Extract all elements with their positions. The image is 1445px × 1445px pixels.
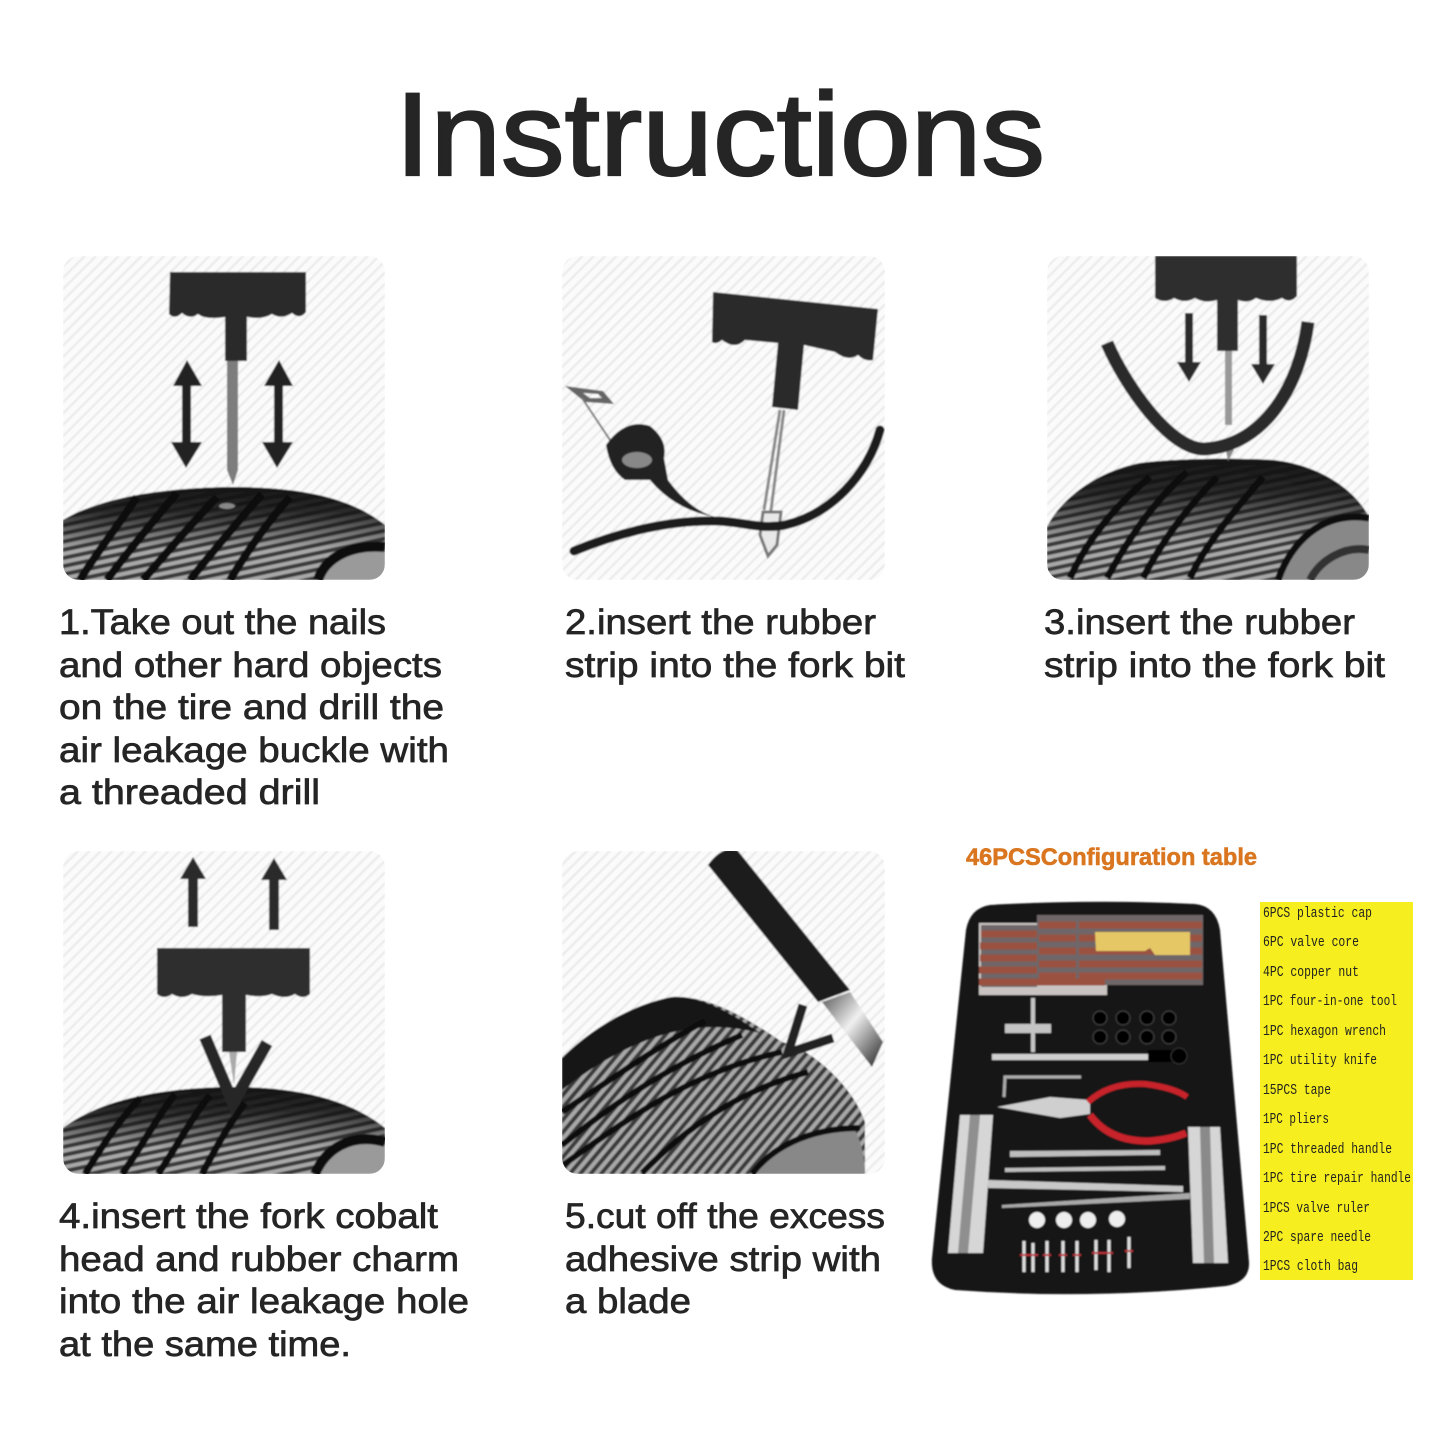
plastic caps bbox=[1093, 1011, 1176, 1044]
icon: rubber strip V bbox=[205, 1037, 267, 1103]
parts list text: 1PCS valve ruler bbox=[1263, 1201, 1370, 1217]
parts list text: 6PC valve core bbox=[1263, 935, 1359, 951]
copper nuts bbox=[1029, 1211, 1125, 1228]
step 4 text: into the air leakage hole bbox=[59, 1282, 469, 1321]
icon: valve and flag bbox=[565, 386, 715, 517]
parts list text: 1PC threaded handle bbox=[1263, 1142, 1392, 1158]
parts list text: 1PC utility knife bbox=[1263, 1053, 1377, 1069]
valve ruler bbox=[992, 1048, 1187, 1064]
panel: step 1 illustration bbox=[63, 256, 385, 580]
step 1 text: a threaded drill bbox=[59, 773, 320, 812]
icon: rubber strip bbox=[1107, 322, 1308, 449]
step 2 text: 2.insert the rubber bbox=[565, 603, 876, 642]
step 4 text: 4.insert the fork cobalt bbox=[59, 1197, 438, 1236]
parts list text: 2PC spare needle bbox=[1263, 1230, 1371, 1246]
arrow: left double bbox=[171, 360, 202, 468]
arrow: right double bbox=[262, 360, 293, 468]
yellow background bbox=[1260, 902, 1413, 1280]
panel: step 5 illustration bbox=[562, 850, 885, 1174]
step 4 text: head and rubber charm bbox=[59, 1240, 459, 1279]
step 5 text: a blade bbox=[565, 1282, 691, 1321]
step 1 text: 1.Take out the nails bbox=[59, 603, 386, 642]
T-handle tubes bbox=[948, 1115, 1228, 1263]
arrow: down left bbox=[1177, 313, 1201, 382]
tire strip packs bbox=[979, 915, 1203, 995]
parts list bbox=[1260, 902, 1413, 1280]
icon: T-handle bbox=[1155, 256, 1297, 461]
icon: T-handle tilted bbox=[712, 292, 878, 410]
icon: tire bbox=[63, 487, 385, 580]
pliers bbox=[997, 1084, 1187, 1141]
panel: step 2 illustration bbox=[562, 256, 885, 580]
panel: step 3 illustration bbox=[1047, 256, 1369, 580]
parts list text: 15PCS tape bbox=[1263, 1083, 1331, 1099]
bag bbox=[932, 902, 1249, 1294]
step 4 text bbox=[59, 1197, 469, 1364]
parts list text: 6PCS plastic cap bbox=[1263, 906, 1372, 922]
step 3 text bbox=[1044, 603, 1385, 685]
arrow: down right bbox=[1251, 315, 1275, 384]
step 4 text: at the same time. bbox=[59, 1325, 351, 1364]
icon: tire bbox=[63, 1087, 385, 1174]
icon: tire bbox=[562, 997, 865, 1174]
arrow: up left bbox=[180, 857, 206, 927]
parts list text: 1PC pliers bbox=[1263, 1112, 1329, 1128]
arrow: up right bbox=[261, 858, 287, 930]
icon: rubber strip bbox=[574, 430, 880, 551]
icon: rubber strip ends bbox=[788, 1005, 833, 1053]
step 5 text: adhesive strip with bbox=[565, 1240, 881, 1279]
parts list text bbox=[1263, 906, 1411, 1275]
icon: tire bbox=[1047, 459, 1369, 580]
icon: knife bbox=[708, 850, 883, 1067]
parts list text: 1PC hexagon wrench bbox=[1263, 1024, 1386, 1040]
configuration table heading: 46PCSConfiguration table bbox=[966, 844, 1257, 871]
valve cores bbox=[1020, 1237, 1133, 1272]
title: Instructions bbox=[395, 69, 1045, 201]
rods and needles bbox=[988, 1150, 1190, 1208]
step 2 text: strip into the fork bit bbox=[565, 646, 905, 685]
photo: tool kit in bag bbox=[932, 902, 1249, 1294]
step 1 text: air leakage buckle with bbox=[59, 731, 449, 770]
step 1 text: on the tire and drill the bbox=[59, 688, 444, 727]
step 3 text: strip into the fork bit bbox=[1044, 646, 1385, 685]
hexagon wrench bbox=[1004, 1077, 1081, 1097]
parts list text: 4PC copper nut bbox=[1263, 965, 1359, 981]
step 1 text: and other hard objects bbox=[59, 646, 442, 685]
step 1 text bbox=[59, 603, 449, 812]
step 5 text bbox=[565, 1197, 885, 1321]
parts list text: 1PCS cloth bag bbox=[1263, 1259, 1358, 1275]
parts list text: 1PC four-in-one tool bbox=[1263, 994, 1397, 1010]
step 2 text bbox=[565, 603, 905, 685]
icon: T-handle with threaded drill bbox=[169, 272, 306, 485]
four-in-one tool bbox=[1005, 998, 1051, 1052]
step 5 text: 5.cut off the excess bbox=[565, 1197, 885, 1236]
icon: fork needle bbox=[764, 410, 784, 552]
step 3 text: 3.insert the rubber bbox=[1044, 603, 1355, 642]
panel: step 4 illustration bbox=[63, 851, 385, 1174]
icon: T-handle with fork bbox=[157, 948, 310, 1085]
